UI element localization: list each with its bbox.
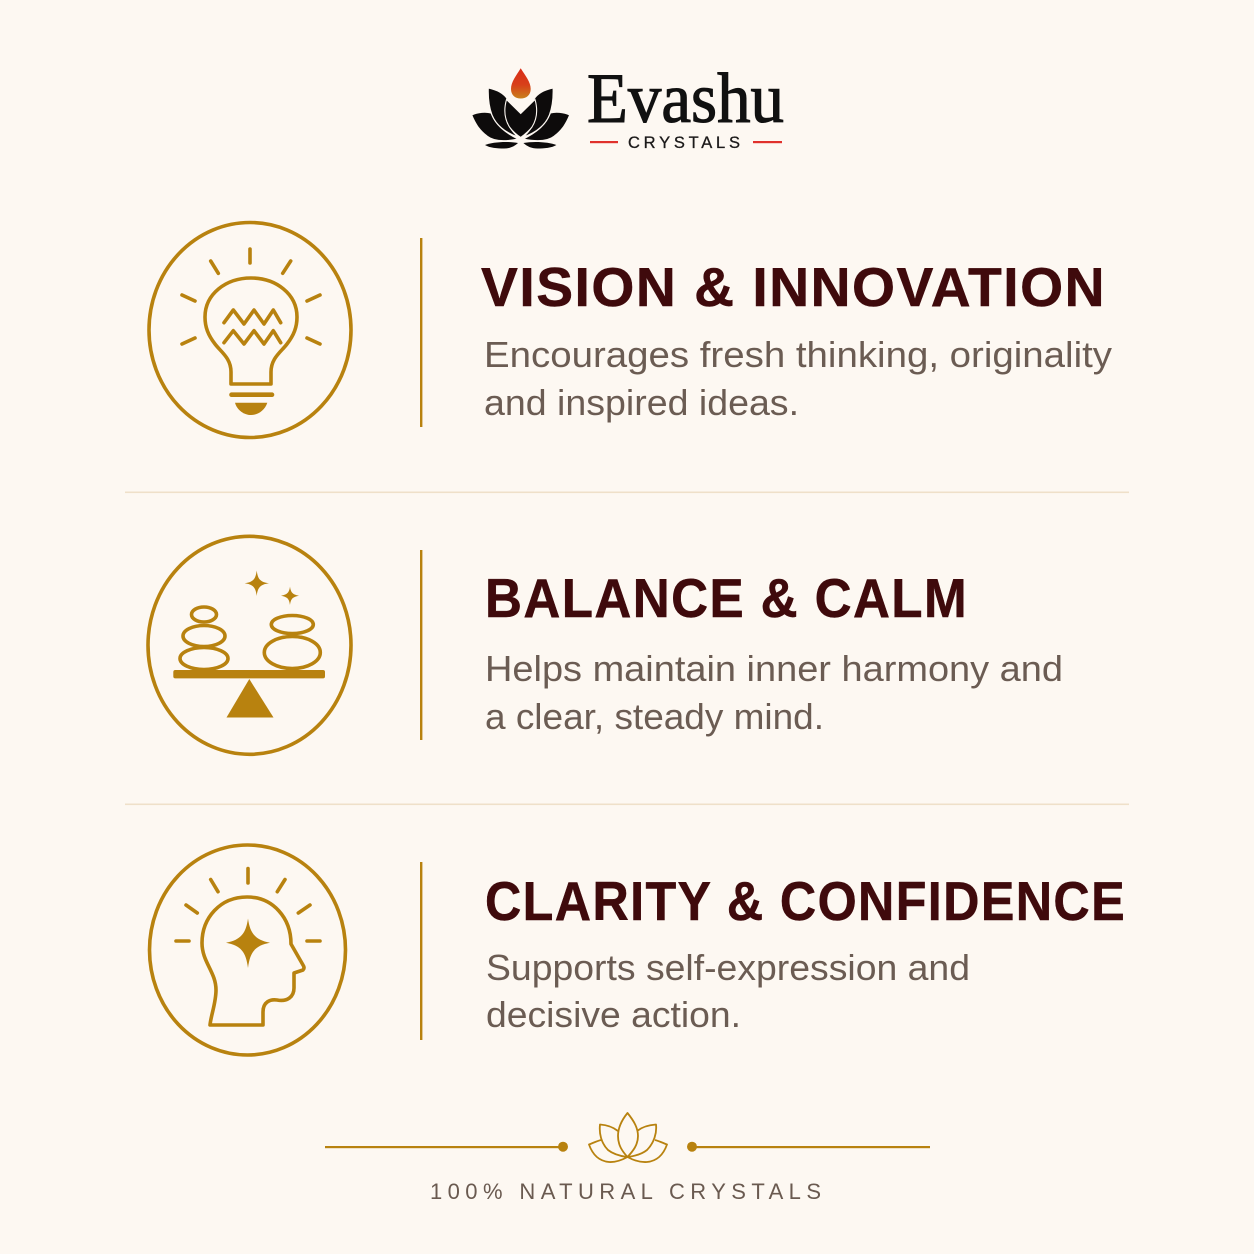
- body text: Helps maintain inner harmony and: [485, 648, 1063, 689]
- body text: decisive action.: [486, 994, 741, 1035]
- heading: BALANCE & CALM: [485, 567, 968, 629]
- body text: Supports self-expression and: [486, 947, 970, 988]
- body text: [484, 334, 1112, 423]
- subtitle: CRYSTALS: [628, 134, 740, 152]
- body text: Encourages fresh thinking, originality: [484, 334, 1112, 375]
- panel: vision and innovation: [149, 222, 1112, 438]
- divider: [420, 862, 422, 1040]
- body text: [486, 947, 970, 1035]
- body text: a clear, steady mind.: [485, 696, 824, 737]
- heading: CLARITY & CONFIDENCE: [485, 870, 1126, 932]
- ornament: left line and dot: [325, 1142, 568, 1152]
- footer: [325, 1113, 930, 1204]
- icon: balancing stones: [148, 536, 351, 754]
- red rule left: [590, 141, 618, 143]
- panel: balance and calm: [148, 536, 1063, 754]
- icon: lotus with red drop: [472, 68, 570, 148]
- icon: light bulb: [149, 222, 351, 438]
- ornament: right line and dot: [687, 1142, 930, 1152]
- divider: [420, 238, 422, 427]
- body text: and inspired ideas.: [484, 382, 799, 423]
- divider: [420, 550, 422, 740]
- icon: head with star: [150, 845, 346, 1055]
- tagline: 100% NATURAL CRYSTALS: [430, 1179, 821, 1204]
- body text: [485, 648, 1063, 737]
- wordmark: Evashu: [587, 60, 784, 138]
- icon: outline lotus: [589, 1113, 667, 1162]
- logo: [472, 60, 784, 152]
- heading: VISION & INNOVATION: [481, 256, 1106, 318]
- red rule right: [753, 141, 782, 143]
- panel: clarity and confidence: [150, 845, 1126, 1055]
